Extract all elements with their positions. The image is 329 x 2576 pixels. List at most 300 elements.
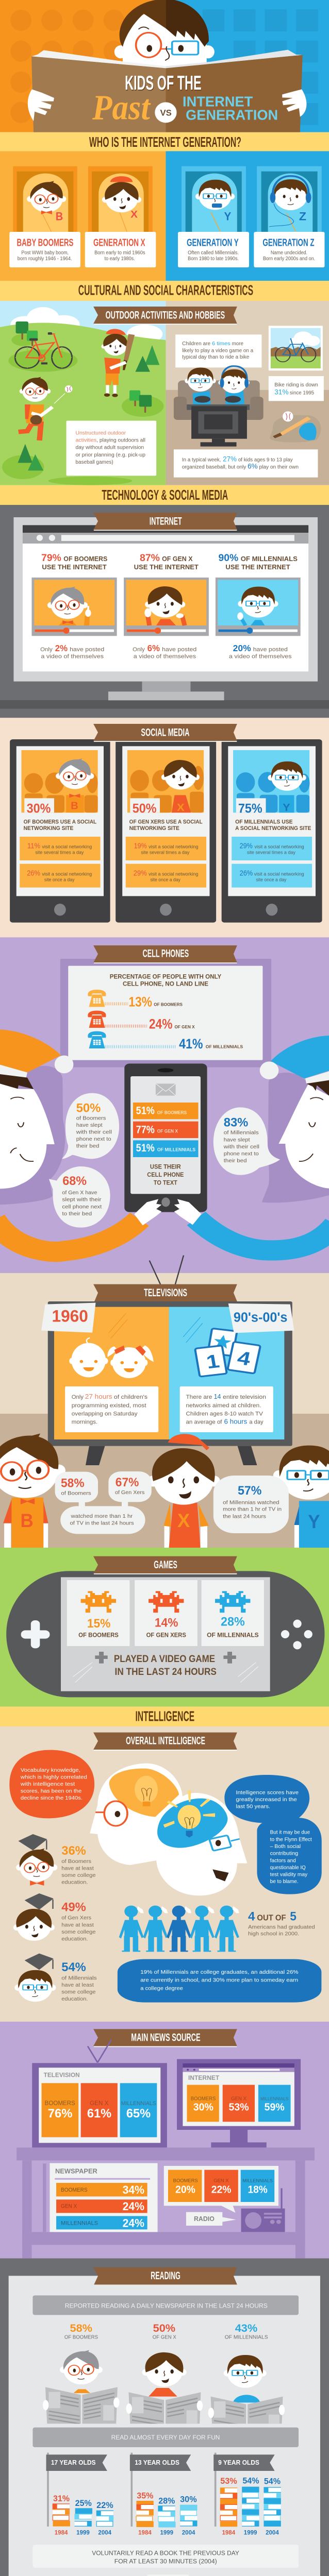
smartphone: OF BOOMERS [157, 1110, 187, 1115]
phone: millennials: 29% [240, 842, 253, 850]
callout: 6 times [175, 334, 261, 367]
phone: boomers: 11% [27, 842, 40, 850]
stat: 4 out of 5: 4 [248, 1909, 255, 1923]
chart: 9 year olds: 2004 [266, 2529, 279, 2536]
row: boomers landline: 13% [128, 994, 152, 1010]
callout: bike riding: since 1995 [290, 391, 314, 396]
game stat: millennials [207, 1591, 259, 1638]
internet use stats: USE THE INTERNET [225, 563, 290, 571]
graduate: gen x: 49% [61, 1900, 86, 1914]
window 7: viewers and games [0, 1433, 329, 1697]
video post stats: a video of themselves [229, 653, 292, 659]
speech bubble: 68 percent [49, 1166, 110, 1228]
chart: 13 year olds: 2004 [182, 2529, 195, 2536]
video post stats: have posted [253, 646, 288, 653]
icon: 14 blocks: 1 [205, 1350, 221, 1373]
graduate: millennial: 54% [61, 1960, 86, 1974]
video player: gen x [124, 578, 209, 636]
character: generation z [269, 176, 311, 227]
banner: reading: READING [151, 2269, 180, 2282]
internet use stats [41, 552, 298, 571]
graduate: boomer: have at least [61, 1866, 94, 1871]
callout: vocabulary: decline since the 1940s. [21, 1795, 83, 1801]
character: millennial viewer: Y [308, 1511, 320, 1532]
newspaper readers [43, 2387, 285, 2424]
speech bubbles: boomers and gen x: 67% [116, 1475, 139, 1489]
callout: intelligence scores: test validity may [270, 1872, 308, 1877]
speech bubbles: boomers and gen x: 58% [61, 1476, 85, 1490]
callout: 6 times: more [232, 341, 243, 347]
phone: boomers: visit a social networking [42, 844, 92, 850]
row: millennials landline: 41% [179, 1037, 203, 1052]
callout: intelligence scores: contributing [270, 1851, 298, 1856]
internet use stats: OF MILLENNIALS [241, 555, 298, 563]
callout: millennials college: 19% of Millennials are college graduates, an additional 26% [140, 1970, 299, 1975]
video post stats [40, 643, 292, 659]
newspaper stats: 50% [153, 2322, 175, 2334]
banner: reading [93, 2267, 237, 2284]
speech bubble: 68 percent: 68% [62, 1174, 87, 1188]
character: millennial viewer [273, 1446, 329, 1548]
bar: read for fun [32, 2428, 299, 2447]
window 2 [0, 236, 324, 485]
graduate: gen x: some college [61, 1929, 96, 1935]
text panel: 1960: Only [72, 1394, 84, 1400]
callout: unstructured outdoor: day without adult supervision [75, 445, 144, 450]
callout: bike riding [269, 376, 324, 401]
text panel: 1960: overlapping on Saturday [72, 1410, 138, 1417]
callout: intelligence scores: be to blame. [270, 1879, 299, 1885]
panel: landline stats: CELL PHONE, NO LAND LINE [123, 980, 208, 987]
character: gen x viewer: X [177, 1510, 190, 1531]
window 10: newspaper radio reading [32, 2163, 299, 2388]
callout: millennials college: a college degree [140, 1986, 183, 1991]
graduate: boomer: of Boomers [61, 1859, 91, 1865]
chart: 9 year olds: 1984 [222, 2529, 236, 2536]
smartphone: 77% [136, 1124, 155, 1136]
chart: 13 year olds: 30% [180, 2494, 197, 2504]
character: boomer [27, 181, 66, 223]
chart: 13 year olds: 28% [158, 2496, 175, 2505]
smartphone: USE THEIR [150, 1163, 181, 1170]
newspaper news: 24% [123, 2217, 144, 2230]
banner: overall intelligence [93, 1733, 237, 1751]
newspaper news: GEN X [61, 2203, 77, 2209]
window 3: internet [0, 487, 329, 709]
graduate: millennial: education. [61, 1996, 88, 2002]
phone: boomers: B [71, 800, 78, 811]
phone: boomers: site several times a day [35, 850, 84, 855]
stat: 4 out of 5: high school in 2000. [248, 1931, 299, 1937]
title: VS [160, 108, 172, 117]
label: 1960: 1960 [52, 1307, 88, 1326]
speech bubbles: boomers and gen x: of Boomers [61, 1491, 91, 1496]
game stat: boomers: OF BOOMERS [78, 1632, 119, 1638]
label: 90s-00s [228, 1303, 294, 1333]
phone: gen x: visit a social networking [149, 844, 199, 850]
row: gen x landline: OF GEN X [175, 1025, 195, 1030]
phone: millennials: 26% [240, 869, 253, 877]
chart: 17 year olds: 1984 [55, 2529, 68, 2536]
generation card descriptions [18, 250, 315, 262]
bar: voluntarily read [32, 2545, 299, 2568]
graduate: millennial: have at least [61, 1982, 94, 1988]
callout: intelligence scores: to the Flynn Effect [270, 1837, 312, 1842]
speech bubble: 50 percent: with their cell [76, 1129, 112, 1135]
row: gen x landline [88, 1011, 195, 1032]
phone: millennials: visit a social networking [255, 844, 304, 850]
icon: millennial brain [156, 1790, 247, 1895]
window 4: social media [10, 724, 322, 923]
generation card descriptions: Post WWII baby boom, [22, 250, 69, 256]
callout: intelligence scores: questionable IQ [270, 1865, 306, 1871]
row: gen x landline: 24% [149, 1016, 172, 1032]
window 8: intelligence [9, 1708, 322, 1895]
speech bubbles: boomers and gen x: of Gen Xers [115, 1490, 145, 1496]
panel: generations [9, 166, 324, 267]
icon: buttons [281, 1620, 312, 1649]
panel: landline stats [60, 959, 271, 1067]
speech bubble: 68 percent: cell phone next [62, 1204, 102, 1210]
callout: intelligence scores: greatly increased in the [236, 1797, 297, 1803]
smartphone: TO TEXT [154, 1179, 177, 1186]
newspaper stats: 58% [70, 2322, 92, 2334]
game caption [73, 1652, 258, 1683]
radio news [164, 2166, 285, 2232]
chart: 13 year olds: 35% [137, 2490, 154, 2500]
window 9: education and news [13, 1893, 321, 2258]
video player: millennial [216, 578, 301, 636]
phone: gen x: site once a day [150, 877, 180, 883]
chart: 17 year olds [46, 2453, 113, 2536]
speech bubble: 11-14 [147, 2574, 189, 2576]
smartphone [124, 1063, 207, 1212]
internet news: BOOMERS [191, 2096, 216, 2102]
chart: 13 year olds [130, 2453, 197, 2536]
graduate: gen x: of Gen Xers [61, 1916, 91, 1921]
smartphone: 51% [136, 1105, 155, 1117]
speech bubble: 50 percent: phone next to [76, 1137, 111, 1142]
handheld console [6, 1571, 324, 1697]
speech bubble: millennials [213, 1476, 289, 1533]
chart: 17 year olds: 25% [75, 2498, 92, 2508]
header illustration [10, 0, 318, 132]
internet news: 59% [265, 2102, 285, 2113]
speech bubble: 50 percent: of Boomers [76, 1115, 106, 1121]
title: Past [92, 89, 151, 127]
chart: 9 year olds [213, 2453, 281, 2536]
newspaper stats: 43% [235, 2322, 257, 2334]
tv news [32, 2040, 167, 2147]
icon: boomer brain [90, 1764, 183, 1865]
callout: 6 times: typical day than to ride a bike [182, 354, 249, 360]
callout: intelligence scores: But it may be due [270, 1830, 310, 1835]
graduate: millennial: some college [61, 1990, 96, 1995]
chart: 17 year olds: 2004 [98, 2529, 112, 2536]
callout: vocabulary [9, 1750, 94, 1818]
stat: 4 out of 5: OUT OF [257, 1913, 286, 1922]
video post stats: have posted [162, 646, 196, 653]
chart: 17 year olds: 22% [96, 2500, 113, 2510]
smartphone: 51% [136, 1142, 155, 1154]
internet use stats: OF BOOMERS [63, 555, 107, 563]
newspaper news: 24% [123, 2200, 144, 2213]
tv news: 65% [126, 2106, 151, 2120]
internet use stats: USE THE INTERNET [42, 563, 107, 571]
window 11 [32, 2387, 299, 2568]
text panel: 90s: Children ages 8-10 watch TV [186, 1410, 264, 1417]
phone: millennials: OF MILLENNIALS USE [235, 818, 293, 825]
callout: 6 times: likely to play a video game on a [182, 348, 254, 353]
speech bubble: 68 percent: of Gen X have [62, 1190, 97, 1196]
graduate: millennial [14, 1954, 97, 2002]
video post stats: 20% [233, 643, 251, 653]
speech bubble: 50 percent: have slept [76, 1123, 103, 1128]
internet news: MILLENNIALS [260, 2096, 289, 2101]
character: generation x [102, 176, 141, 220]
character: generation y: Y [224, 211, 231, 223]
speech bubbles: boomers and gen x: of TV in the last 24 hours [70, 1521, 134, 1526]
trees [16, 321, 159, 470]
graduate: boomer: 36% [61, 1843, 86, 1857]
newspaper: boomer [43, 2387, 120, 2427]
radio news: 22% [211, 2184, 232, 2195]
callout: 6 times: 6 times [212, 341, 231, 347]
banner: social media: SOCIAL MEDIA [141, 726, 189, 739]
phone: gen x: visit a social networking [149, 872, 199, 877]
generation card text: GENERATION X [93, 236, 145, 248]
callout: intelligence scores: – Both social [270, 1844, 301, 1850]
smartphone: OF GEN X [157, 1129, 178, 1134]
text panel: 90s [180, 1386, 273, 1432]
video player: boomer [31, 578, 117, 636]
video post stats: Only [133, 646, 145, 653]
radio news: RADIO [194, 2215, 215, 2223]
video post stats: 2% [55, 643, 68, 653]
title: KIDS OF THE [125, 73, 202, 95]
generation card descriptions: Name undecided. [271, 250, 307, 256]
tv news: 61% [87, 2106, 111, 2120]
character: boomer viewer: B [20, 1510, 34, 1531]
newspaper news: 34% [123, 2184, 144, 2196]
generation card descriptions: Born 1980 to late 1990s. [188, 256, 239, 262]
speech bubble: 50 percent: 50% [76, 1101, 101, 1115]
photo: blue bicycle [269, 326, 323, 370]
chart: 9 year olds: 9 YEAR OLDS [218, 2459, 259, 2466]
game caption: IN THE LAST 24 HOURS [115, 1666, 217, 1677]
internet use stats: 79% [41, 552, 61, 563]
stat: 4 out of 5: 5 [290, 1909, 297, 1923]
banner: internet [93, 513, 237, 531]
newspaper news: BOOMERS [61, 2187, 88, 2193]
text panel: 90s: an average of [186, 1419, 222, 1425]
bar: voluntarily read: VOLUNTARILY READ A BOOK THE PREVIOUS DAY [92, 2550, 239, 2556]
chart: 13 year olds: 13 YEAR OLDS [135, 2459, 179, 2466]
speech bubble: 83 percent: their bed [224, 1158, 247, 1164]
callout: 27 percent: In a typical week, [182, 457, 221, 463]
stat: 4 out of 5 [248, 1909, 315, 1937]
phone: gen x: 29% [134, 869, 147, 877]
text panel: 90s: 14 [214, 1393, 221, 1400]
callout: 6 times: Children are [182, 341, 210, 347]
tv news: MILLENNIALS [121, 2100, 156, 2107]
scene: kids gaming on couch [174, 366, 264, 447]
smartphone: OF MILLENNIALS [157, 1147, 195, 1153]
chart: 9 year olds: 54% [264, 2476, 281, 2486]
newspaper: gen x [126, 2393, 203, 2424]
generation card descriptions: to early 1980s. [105, 256, 135, 262]
internet use stats: 87% [140, 552, 160, 563]
newspaper: millennial [208, 2397, 285, 2424]
banner: cell phones [93, 945, 237, 963]
banner: main news source: MAIN NEWS SOURCE [131, 2031, 201, 2044]
banner: televisions [93, 1284, 237, 1301]
callout: intelligence scores: Intelligence scores have [236, 1790, 299, 1795]
callout: 27 percent: play on their own [259, 465, 299, 470]
hands on phone [134, 1199, 202, 1225]
icon: five people [119, 1906, 239, 1952]
callout: intelligence scores [224, 1775, 322, 1894]
graduate: gen x: have at least [61, 1922, 94, 1928]
row: boomers landline: OF BOOMERS [154, 1002, 183, 1007]
chart: 13 year olds: 1984 [138, 2529, 152, 2536]
icon: 14 blocks: 4 [236, 1347, 253, 1370]
speech bubble: 68 percent: to their bed [62, 1211, 92, 1217]
internet news: GEN X [231, 2096, 247, 2102]
tv news: TELEVISION [44, 2072, 80, 2078]
text panel: 90s: a day [249, 1419, 264, 1425]
phone: boomers: site once a day [44, 877, 74, 883]
banner: outdoor activities [93, 307, 237, 325]
bar: reported reading: REPORTED READING A DAILY NEWSPAPER IN THE LAST 24 HOURS [65, 2302, 268, 2309]
banner: social media [93, 724, 237, 742]
banner: main news source [93, 2029, 237, 2047]
game stat: boomers: 15% [87, 1616, 111, 1630]
internet news [177, 2059, 301, 2147]
graduate: millennial: of Millennials [61, 1975, 97, 1981]
window 6: televisions [41, 1256, 294, 1446]
character: boomer viewer [0, 1433, 65, 1548]
character: batter [101, 329, 135, 397]
phone: gen x: NETWORKING SITE [129, 825, 179, 832]
text panel: 90s: There are [186, 1394, 212, 1400]
banner: televisions: TELEVISIONS [144, 1286, 187, 1299]
callout: 27 percent: 6% [248, 463, 258, 470]
window 5-6: cell phones [0, 945, 329, 1252]
chart: 9 year olds: 1999 [244, 2529, 257, 2536]
icon: 14 blocks [195, 1328, 260, 1377]
character: generation y [195, 180, 235, 223]
title: GENERATION [186, 107, 278, 123]
text panel: 90s: networks aimed at children. [186, 1402, 261, 1409]
callout: unstructured outdoor: activities [75, 437, 97, 443]
game stat: gen x: 14% [155, 1616, 178, 1630]
radio news: GEN X [213, 2178, 229, 2183]
internet use stats: OF GEN X [162, 555, 193, 563]
game stat: gen x [146, 1591, 186, 1638]
newspaper stats: OF GEN X [153, 2335, 176, 2340]
speech bubble: 83 percent: with their cell [223, 1144, 259, 1150]
callout: vocabulary: scores, has been on the [21, 1788, 81, 1794]
game stat: gen x: OF GEN XERS [146, 1632, 186, 1638]
newspaper stats: OF BOOMERS [64, 2335, 98, 2340]
radio news: 20% [175, 2184, 195, 2195]
label: 1960 [41, 1303, 96, 1333]
callout: unstructured outdoor: , playing outdoors all [96, 437, 145, 443]
phone: gen x: site several times a day [141, 850, 189, 855]
speech bubble: 83 percent: of Millennials [224, 1130, 259, 1136]
phone: millennials [222, 739, 322, 923]
chart: 17 year olds: 1999 [76, 2529, 90, 2536]
row: millennials landline: OF MILLENNIALS [206, 1044, 243, 1049]
stat: 4 out of 5: Americans had graduated [248, 1924, 315, 1930]
label: 90s-00s: 90's-00's [234, 1310, 287, 1325]
icon: baseball gear [270, 411, 321, 443]
tv news: BOOMERS [45, 2099, 75, 2107]
phone: boomers [10, 739, 110, 923]
title: KIDS OF THE [125, 72, 202, 94]
generation card descriptions: Often called Millennials. [188, 250, 239, 256]
speech bubbles: boomers and gen x: watched more than 1 hr [71, 1514, 133, 1519]
callout: 27 percent: 27% [223, 455, 237, 463]
graduate: gen x [13, 1893, 96, 1942]
bar: voluntarily read: FOR AT LEAST 30 MINUTES (2004) [114, 2558, 217, 2565]
internet use stats: USE THE INTERNET [134, 563, 199, 571]
phone: gen x: 50% [133, 801, 157, 816]
text panel: 1960: of children's [114, 1394, 147, 1400]
callout: bike riding: Bike riding is down [274, 382, 318, 388]
newspaper stats: OF MILLENNIALS [225, 2335, 268, 2340]
callout: unstructured outdoor: Unstructured outdoor [75, 430, 126, 436]
icon: dpad [21, 1620, 50, 1648]
callout: unstructured outdoor: baseball games) [75, 460, 113, 465]
game stat: boomers [78, 1591, 119, 1638]
phone: boomers: OF BOOMERS USE A SOCIAL [24, 818, 96, 825]
smartphone: CELL PHONE [147, 1171, 184, 1178]
generation card text: GENERATION Y [187, 236, 239, 248]
row: millennials landline [88, 1031, 243, 1052]
banner: internet: INTERNET [150, 515, 182, 528]
banner: overall intelligence: OVERALL INTELLIGENCE [126, 1735, 205, 1747]
video post stats: have posted [70, 646, 104, 653]
phone: millennials: 75% [238, 801, 262, 816]
chart: 9 year olds: 53% [220, 2476, 237, 2486]
chart: 9 year olds: 54% [242, 2476, 259, 2485]
radio news: MILLENNIALS [242, 2178, 273, 2183]
speech bubble: millennials: the last 24 hours [223, 1514, 266, 1519]
text panel: 1960 [65, 1386, 158, 1432]
banner: games: GAMES [154, 1558, 177, 1571]
callout: millennials college [118, 1959, 321, 2003]
window 8: intelligence: INTELLIGENCE [135, 1708, 194, 1724]
chart: 13 year olds: 1999 [160, 2529, 173, 2536]
title [92, 72, 278, 127]
arms [0, 1218, 329, 1252]
speech bubble: 50 percent [62, 1093, 119, 1159]
character: generation z: Z [299, 211, 306, 223]
newspaper news: NEWSPAPER [55, 2167, 97, 2175]
callout: bike riding: 31% [274, 388, 289, 396]
phone: boomers: NETWORKING SITE [24, 825, 73, 832]
text panel: 90s: 6 hours [224, 1418, 247, 1425]
generation card text: BABY BOOMERS [17, 236, 73, 248]
phone: gen x [116, 739, 216, 923]
callout: 27 percent: organized baseball, but only [182, 465, 246, 470]
video post stats: a video of themselves [41, 653, 104, 659]
character: fielder [19, 377, 72, 440]
callout: vocabulary: with intelligence test [20, 1782, 75, 1787]
phone: boomers: 30% [27, 801, 51, 816]
